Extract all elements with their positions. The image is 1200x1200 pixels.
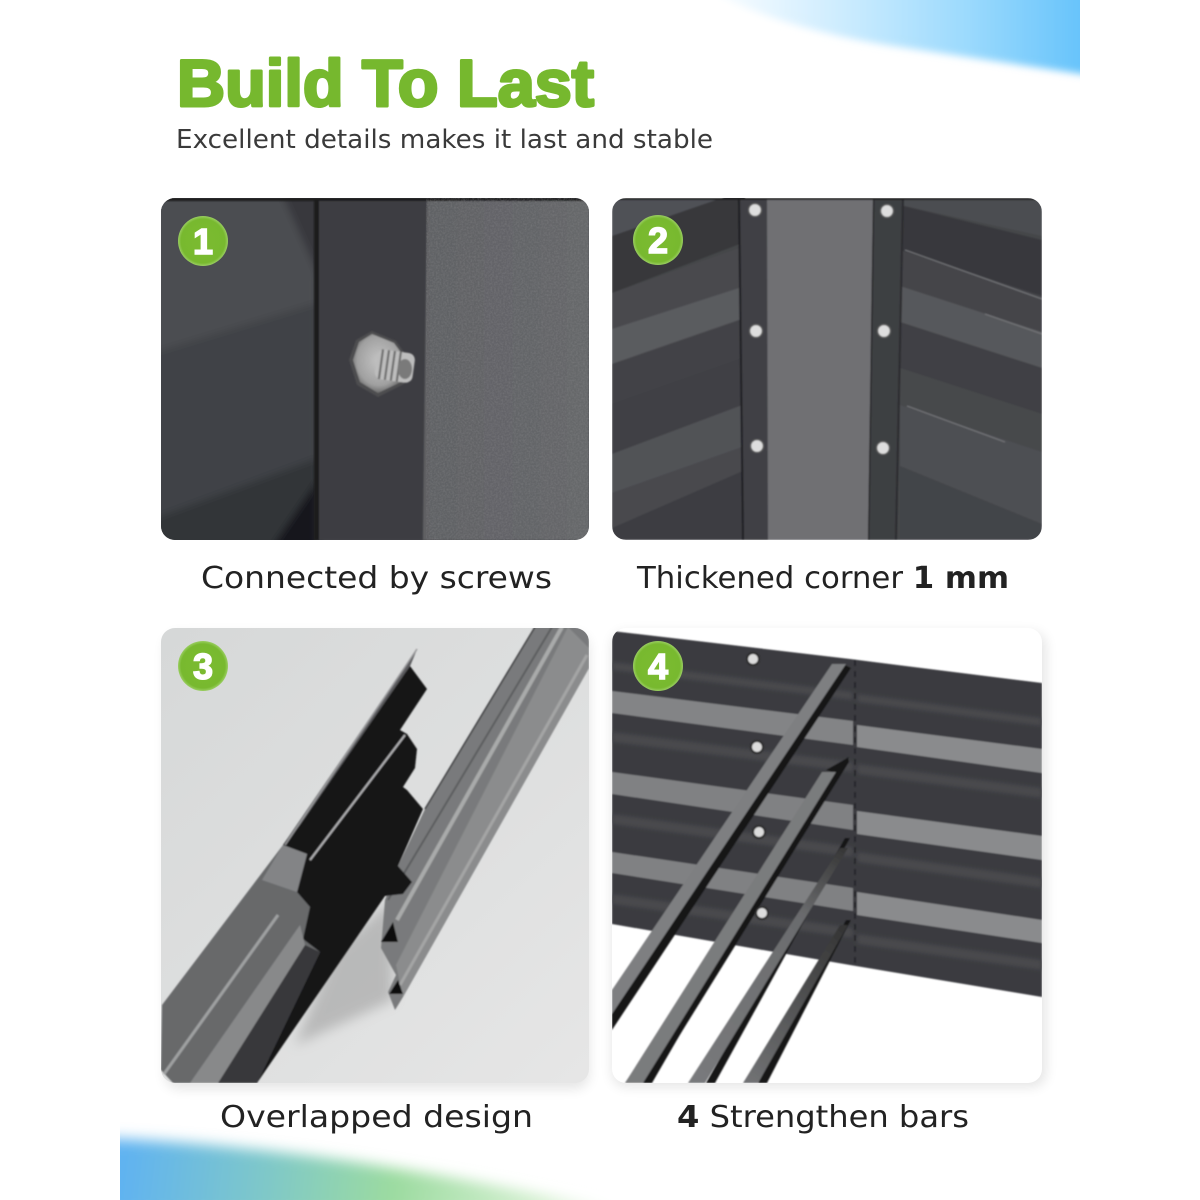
caption 3: Overlapped design (220, 1100, 533, 1135)
title: Build To Last (177, 46, 594, 120)
caption 4: 4 Strengthen bars (677, 1100, 969, 1135)
left rail gray lower section (161, 845, 320, 1083)
caption 2: Thickened corner 1 mm (636, 561, 1009, 596)
panel 3: overlapped design (161, 627, 589, 1083)
left chevron bands (612, 190, 745, 540)
left facets (161, 198, 318, 540)
central thickened plate (767, 198, 873, 540)
badge 1: 1 (193, 221, 213, 262)
overlapped black sections (257, 648, 428, 1082)
decorative blue-green corner gradient bottom left (100, 1138, 640, 1200)
right chevron bands (900, 198, 1042, 540)
light stripes (612, 691, 1042, 943)
decorative blue corner gradient top right (734, 0, 1080, 80)
strengthening bars (612, 664, 851, 1083)
right rail (381, 627, 589, 1010)
panel 1: screw connection (150, 190, 589, 550)
corner strips (740, 200, 746, 470)
corrugated wall (612, 631, 1042, 997)
badge 2: 2 (648, 220, 668, 261)
vertical steel band (317, 198, 427, 540)
speckled right surface (423, 198, 589, 540)
panel 4 shadow (612, 632, 1046, 1087)
icon: wall screws (747, 653, 768, 919)
panel 4: strengthen bars (612, 628, 1042, 1083)
badge 4 (633, 641, 683, 691)
icon: corner screws (748, 204, 894, 454)
badge 2 (633, 215, 683, 265)
badge 3: 3 (193, 646, 213, 687)
icon: hex nut and threaded bolt (349, 331, 416, 397)
badge 4: 4 (648, 646, 668, 687)
panel 2: thickened corner (612, 190, 1042, 540)
subtitle: Excellent details makes it last and stable (176, 125, 713, 155)
panel 3 shadow (165, 634, 589, 1089)
caption 1: Connected by screws (201, 561, 552, 596)
soft shadow under rails (295, 900, 393, 1045)
badge 1 (178, 216, 228, 266)
badge 3 (178, 641, 228, 691)
